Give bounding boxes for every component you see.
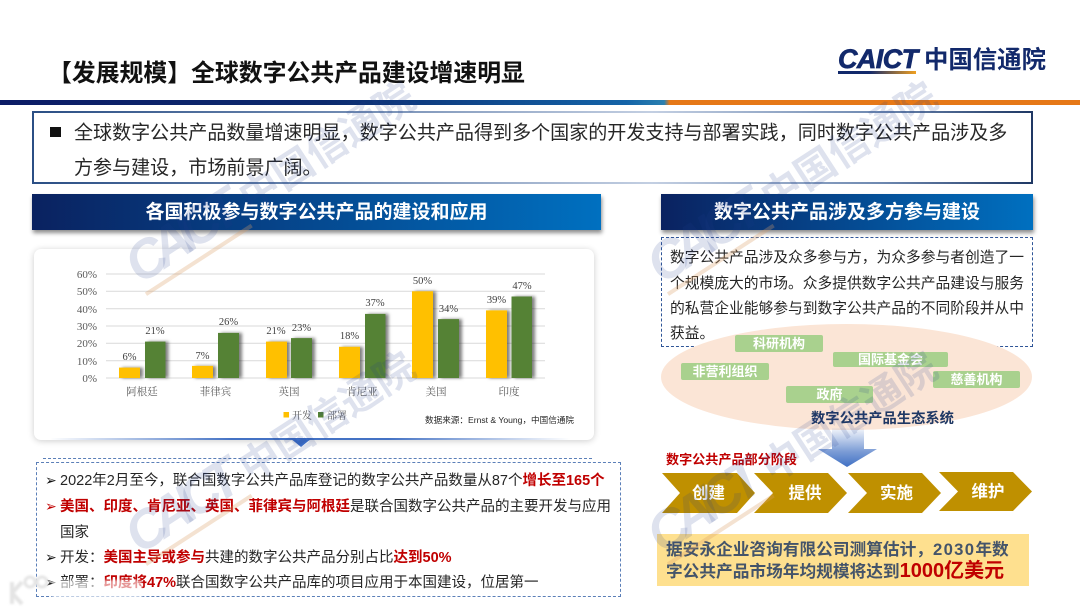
bar chart: 印度 <box>498 385 520 398</box>
tag: charity <box>933 371 1020 388</box>
callout: market size <box>657 534 1029 586</box>
tag: foundation: 国际基金会 <box>858 352 923 367</box>
ecosystem tags <box>681 335 1020 403</box>
bar chart: 菲律宾 <box>200 385 232 398</box>
chevron: provide <box>754 473 847 513</box>
tag: nonprofit: 非营利组织 <box>692 364 758 379</box>
bullet square <box>50 127 61 137</box>
finding 1: ➢ <box>45 473 57 489</box>
watermarks: 中国信通院 <box>232 345 423 491</box>
chevron: implement <box>848 473 941 513</box>
bar chart: 26% <box>219 317 238 328</box>
finding 2: ➢ <box>45 499 57 515</box>
bar chart: 39% <box>487 295 506 306</box>
participants text: 获益。 <box>670 326 714 342</box>
bar chart: 10% <box>77 356 97 368</box>
icon: pointer triangle <box>290 438 312 447</box>
bar chart: 40% <box>77 304 97 316</box>
right section heading <box>661 194 1033 230</box>
bar chart: 6% <box>122 352 137 363</box>
logo: CAICT 中国信通院: 中国信通院 <box>924 47 1046 74</box>
finding 4: ➢ <box>45 575 57 591</box>
watermarks: CAICT <box>114 174 256 295</box>
bar chart: 美国 <box>426 385 446 398</box>
chevron: maintain <box>939 472 1032 511</box>
watermarks: 中国信通院 <box>754 345 945 491</box>
tag: government: 政府 <box>816 387 842 402</box>
bar chart: 50% <box>413 276 432 287</box>
summary text: 全球数字公共产品数量增速明显，数字公共产品得到多个国家的开发支持与部署实践，同时数字公共产品涉及多 <box>74 123 1007 144</box>
bar chart: 37% <box>365 298 385 309</box>
chevron: create: 创建 <box>692 484 725 502</box>
summary text: 方参与建设，市场前景广阔。 <box>74 158 322 179</box>
chevron: provide: 提供 <box>788 484 822 502</box>
bar chart: 23% <box>292 323 311 334</box>
participants text: 个规模庞大的市场。众多提供数字公共产品建设与服务 <box>670 276 1024 292</box>
bar chart: 开发 <box>292 409 312 422</box>
bar chart: 21% <box>145 326 165 337</box>
bar chart: 34% <box>439 304 458 315</box>
logo: CAICT 中国信通院 <box>838 44 1046 74</box>
bar chart: 30% <box>77 321 97 333</box>
bar chart: 21% <box>266 326 286 337</box>
bar chart: 0% <box>82 373 97 385</box>
watermarks: 中国信通院 <box>754 75 945 221</box>
bar chart: 47% <box>512 281 532 292</box>
summary box <box>32 111 1033 184</box>
tag: research <box>735 335 823 352</box>
right section heading: 数字公共产品涉及多方参与建设 <box>714 202 980 223</box>
finding 2: 美国、印度、肯尼亚、英国、菲律宾与阿根廷是联合国数字公共产品的主要开发与应用 <box>60 499 611 515</box>
tag: government <box>786 386 873 403</box>
panel: chart card <box>34 249 594 440</box>
bar chart: 肯尼亚 <box>346 385 378 398</box>
bar chart: 18% <box>340 331 359 342</box>
ecosystem label: 数字公共产品生态系统 <box>811 411 954 427</box>
bar chart: 50% <box>77 286 97 298</box>
watermarks: 中国信通院 <box>232 75 423 221</box>
participants text: 数字公共产品涉及众多参与方，为众多参与者创造了一 <box>670 250 1024 266</box>
participants text <box>670 249 1024 342</box>
title: 【发展规模】全球数字公共产品建设增速明显 <box>48 60 525 87</box>
participants text: 的私营企业能够参与到数字公共产品的不同阶段并从中 <box>670 301 1024 317</box>
card bottom accent line <box>50 438 570 440</box>
callout: market size: 字公共产品市场年均规模将达到1000亿美元 <box>666 560 1004 582</box>
finding 1: 2022年2月至今，联合国数字公共产品库登记的数字公共产品数量从87个增长至165个 <box>60 473 605 489</box>
tag: research: 科研机构 <box>753 336 805 351</box>
tag: foundation <box>833 352 948 367</box>
finding 4: 部署：印度将47%联合国数字公共产品库的项目应用于本国建设，位居第一 <box>60 575 539 591</box>
bar chart: 阿根廷 <box>126 385 158 398</box>
corner stamp <box>10 575 144 605</box>
logo: CAICT 中国信通院: CAICT <box>838 44 918 74</box>
watermarks: CAICT <box>114 444 256 565</box>
watermarks: CAICT <box>636 444 778 565</box>
arrow: down <box>818 428 877 467</box>
bar chart: 部署 <box>327 409 347 422</box>
chevron: maintain: 维护 <box>972 482 1004 501</box>
top dotted rule <box>43 458 592 459</box>
ecosystem ellipse <box>661 324 1032 430</box>
tag: charity: 慈善机构 <box>950 372 1002 387</box>
finding 3: 开发：美国主导或参与共建的数字公共产品分别占比达到50% <box>60 550 452 566</box>
panel: key findings <box>36 462 621 597</box>
stage chevrons <box>662 472 1032 513</box>
callout: market size: 据安永企业咨询有限公司测算估计，2030年数 <box>666 540 1009 559</box>
summary text <box>74 122 1007 179</box>
chart source note: 数据来源：Ernst & Young，中国信通院 <box>425 415 574 425</box>
header rule <box>0 100 1080 104</box>
finding 2 <box>45 498 611 540</box>
watermarks: CAICT <box>636 174 778 295</box>
finding 3: ➢ <box>45 550 57 566</box>
chevron: implement: 实施 <box>880 482 914 502</box>
left section heading <box>32 194 601 230</box>
stages label: 数字公共产品部分阶段 <box>666 452 797 467</box>
tag: nonprofit <box>681 363 769 380</box>
bar chart: 60% <box>77 269 97 281</box>
panel: participants description <box>661 237 1033 347</box>
left section heading: 各国积极参与数字公共产品的建设和应用 <box>145 202 488 223</box>
bar chart: 7% <box>196 351 210 362</box>
bar chart: 20% <box>77 338 97 350</box>
finding 2: 国家 <box>60 524 89 540</box>
bar chart: 英国 <box>278 385 300 398</box>
chevron: create <box>662 473 755 513</box>
